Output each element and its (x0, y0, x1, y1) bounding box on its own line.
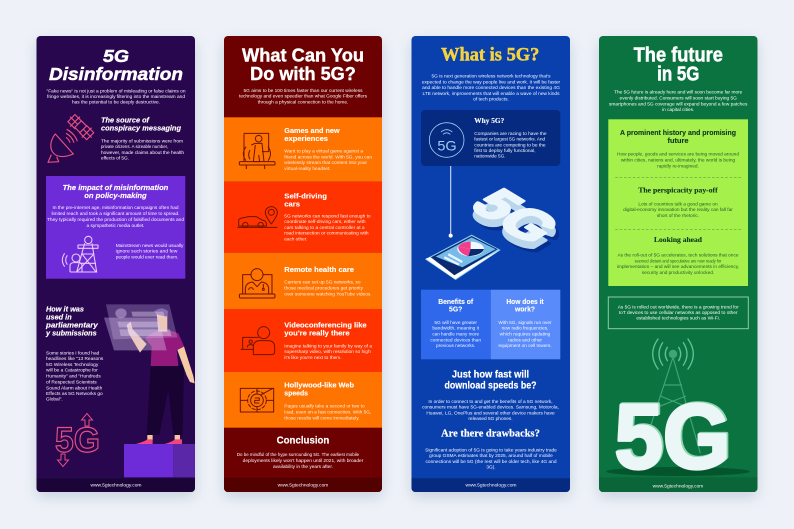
text: drawbacks: Significant adoption of 5G is going to take years industry trade (425, 447, 557, 453)
text: mainstream news: Mainstream news would usually (116, 243, 184, 249)
conclusion: Do be mindful of the hype surrounding 5G. The earliest mobile (237, 452, 359, 458)
text: over someone watching YouTube videos. (284, 291, 372, 297)
text: it's like you're next to them. (284, 355, 342, 361)
text: new radio frequencies, (502, 326, 548, 332)
heading: parliamentary: How it was (46, 304, 84, 313)
text: perspicacity: digital-economy innovation but the reality can fall far (623, 207, 733, 213)
text: prominent history (617, 152, 739, 169)
text: parliamentary: Sound Alarm about Health (46, 385, 103, 391)
text: drawbacks: connections will be 5G (the rest will be older tech, like 4G and (426, 459, 557, 465)
text: previous networks. (436, 343, 475, 349)
heading (284, 321, 367, 338)
text: mainstream news (116, 243, 184, 261)
text: which requires updating (500, 331, 551, 337)
title: Do with 5G? (250, 64, 356, 84)
icon: satellite and dish (48, 112, 97, 162)
intro text: fringe websites, it is increasingly filtering into the mainstream and (47, 94, 185, 100)
text (284, 404, 371, 421)
section: remote health care (239, 265, 372, 298)
text: looking ahead: As the roll-out of 5G accelerates, tech solutions that once (618, 253, 739, 259)
intro text: and able to handle more connected devices than the existing 4G (422, 85, 560, 91)
panel: The future in 5G (599, 36, 758, 492)
heading: prominent history: A prominent history and promising (620, 128, 736, 137)
text: looking ahead (617, 253, 739, 276)
heading: parliamentary (45, 304, 99, 337)
text: source: private citizens. A sizeable number, (101, 144, 168, 150)
text: cars talking to a central controller at a (284, 225, 365, 231)
text: impact: They typically required the production of falsified documents and (47, 217, 184, 223)
title: What Can You (242, 46, 364, 66)
heading: Why 5G? (474, 116, 505, 125)
intro text: expected to change the way people live and work. It will be faster (422, 79, 561, 85)
panel: benefits of 5G (421, 290, 491, 359)
text: first to deploy fully functional, (474, 148, 536, 154)
text: 5G networks can respond fast enough to (284, 213, 371, 219)
text (284, 149, 372, 172)
heading: impact: The impact of misinformation (63, 183, 169, 192)
heading: prominent history (620, 128, 736, 145)
intro text: technology and even speedier than what Google Fiber offers (239, 94, 368, 100)
heading: download speeds (444, 369, 536, 392)
text (474, 131, 547, 160)
title (634, 45, 723, 86)
footer url: www.5gtechnology.com (90, 483, 142, 489)
illustration: big 3D 5G: 5G (616, 385, 732, 487)
text: drawbacks: group GSMA estimates that by 2025, around half of mobile (429, 453, 553, 459)
icon: car and map pin (237, 207, 277, 228)
panel: 5G Disinformation (36, 36, 195, 492)
intro text: has the potential to be deeply destructive. (72, 99, 160, 105)
heading: download speeds: download speeds be? (444, 380, 536, 392)
text: download speeds: released 5G phones. (468, 416, 513, 422)
panel: why 5G (421, 110, 560, 166)
heading (284, 126, 340, 143)
heading: experiences (284, 134, 328, 143)
heading: drawbacks: Are there drawbacks? (441, 429, 540, 440)
text: mainstream news: people would ever read them. (116, 255, 178, 261)
heading: speeds (284, 389, 308, 398)
icon: neon 5G with arrows: 5G (55, 421, 100, 460)
intro text: 5G aims to be 100 times faster than our current wireless (244, 88, 363, 94)
text: Imagine talking to your family by way of a (284, 343, 372, 349)
heading: source: The source of (101, 115, 150, 124)
text: prominent history: How people, goods and services are being moved around (617, 152, 739, 158)
text: prominent history: within cities, nations and, ultimately, the world is being (621, 157, 735, 163)
text: parliamentary: of Respected Scientists (46, 379, 97, 385)
text: looking ahead: security and productivity unlocked. (642, 270, 714, 276)
heading: Videoconferencing like (284, 321, 367, 330)
text: perspicacity: Lots of countries talk a good game on (638, 201, 718, 207)
text: friend across the world. With 5G, you can (284, 154, 372, 160)
connector line (449, 166, 453, 238)
text: parliamentary: Humanity" and "Hundreds (46, 373, 101, 379)
icon: 5G wifi circle: 5G (437, 138, 457, 154)
text: parliamentary: will be a Catastrophe for (46, 368, 98, 374)
heading: source (101, 115, 182, 132)
conclusion: availability in the years after. (273, 464, 333, 470)
text: parliamentary: 5G Wireless Technology (46, 362, 99, 368)
heading: impact (63, 183, 169, 200)
text: each other. (284, 237, 307, 243)
intro text: of tech products. (473, 97, 509, 103)
text: impact: In the pre-internet age, misinformation campaigns often had (52, 205, 179, 211)
text: parliamentary: headlines like "13 Reasons (46, 356, 104, 362)
heading (284, 191, 327, 208)
text: road intersection or communicating with (284, 231, 369, 237)
text: fastest or largest 5G networks. And (474, 137, 545, 143)
heading: Hollywood-like Web (284, 381, 355, 390)
heading: prominent history: future (668, 136, 688, 145)
text: source: The majority of submissions were from (101, 138, 183, 144)
title: Disinformation (49, 64, 183, 84)
heading: you're really there (284, 329, 350, 338)
illustration: isometric 5G: 5G (458, 181, 574, 251)
heading: source: conspiracy messaging (101, 123, 182, 132)
title (242, 46, 364, 84)
section: videoconferencing (241, 321, 372, 361)
section: self-driving cars (237, 191, 371, 243)
footer url: www.5gtechnology.com (466, 483, 516, 489)
text: download speeds: In order to connect to and get the benefits of a 5G network, (428, 399, 553, 405)
heading (506, 297, 544, 314)
intro text: smartphones and 5G coverage will expand beyond a few patches (609, 101, 748, 107)
title: What is 5G? (441, 45, 539, 66)
illustration: big 3D 5G: 5G (614, 386, 730, 488)
text: wirelessly stream that content into your (284, 160, 367, 166)
text: impact (47, 205, 184, 229)
heading: looking ahead: Looking ahead (654, 235, 702, 244)
text: load, even on a fast connection. With 5G, (284, 409, 371, 415)
text: prominent history: rapidly re-imagined. (657, 163, 699, 169)
intro text: The 5G future is already here and will soon become far more (614, 90, 743, 96)
illustration: isometric 5G: 5G (461, 191, 577, 262)
heading (284, 381, 355, 398)
panel: What is 5G (412, 36, 577, 492)
heading: cars (284, 199, 300, 208)
callout: As 5G is rolled out worldwide, there is a growing trend for (618, 304, 739, 310)
title: 5G (103, 46, 129, 66)
illustration: person with holographic screens on platform (104, 304, 195, 477)
panel: green content box (608, 119, 748, 286)
text: drawbacks (425, 447, 557, 471)
footer url: www.5gtechnology.com (653, 484, 703, 490)
heading: 5G? (449, 305, 463, 314)
text (284, 343, 372, 361)
footer url: www.5gtechnology.com (278, 483, 328, 489)
text: supersharp video, with resolution so high (284, 349, 371, 355)
text: looking ahead: implementation – and will see advancements in efficiency, (617, 264, 739, 270)
text: source (101, 138, 184, 162)
callout: IoT devices to use cellular networks as opposed to other (619, 310, 738, 316)
text: Carriers can set up 5G networks, so (284, 280, 361, 286)
text: nationwide 5G. (474, 154, 506, 160)
title (49, 46, 183, 84)
heading: How does it (506, 297, 544, 306)
text (284, 213, 371, 243)
text: countries are competing to be the (474, 142, 546, 148)
text: parliamentary: Global". (46, 397, 63, 403)
text: Companies are racing to have the (474, 131, 547, 137)
text: coordinate self-driving cars, either with (284, 219, 366, 225)
heading: Games and new (284, 126, 340, 135)
intro text (46, 88, 186, 105)
text: Want to play a virtual game against a (284, 149, 363, 155)
intro text: through a physical connection to the home. (258, 99, 348, 105)
heading: impact: on policy-making (84, 191, 147, 200)
text: download speeds (422, 399, 559, 422)
heading: download speeds: Just how fast will (452, 369, 529, 381)
text: bandwidth, meaning it (432, 326, 480, 332)
conclusion: Conclusion (277, 435, 329, 447)
title: The future (634, 45, 723, 67)
text: source: effects of 5G. (101, 156, 129, 162)
heading: Remote health care (284, 265, 354, 274)
text: drawbacks: 3G). (486, 465, 496, 471)
intro text: evenly distributed. Consumers will soon start buying 5G (620, 95, 737, 101)
heading (438, 297, 474, 314)
text: Pages usually take a second or two to (284, 404, 365, 410)
text: those medical procedures get priority (284, 285, 364, 291)
panel: how does it work (491, 290, 560, 359)
text: can handle many more (432, 331, 479, 337)
callout (608, 297, 748, 329)
text: radios and other (508, 337, 542, 343)
callout: established technologies such as Wi-Fi. (636, 316, 720, 322)
text: perspicacity (623, 201, 733, 219)
text: parliamentary (46, 350, 104, 403)
text (498, 320, 552, 349)
conclusion (237, 435, 364, 470)
conclusion: deployments likely won't happen until 2021, with broader (243, 458, 364, 464)
intro text (239, 88, 368, 105)
icon: VR game (239, 133, 275, 169)
text: source: however, made claims about the health (101, 150, 184, 156)
intro text (422, 74, 561, 103)
text: perspicacity: short of the rhetoric. (657, 213, 699, 219)
intro text: "Fake news" is not just a problem of misleading or false claims on (46, 88, 186, 94)
illustration: phone with pie chart (425, 235, 501, 280)
text: impact: limited reach and took a significant amount of time to spread. (52, 211, 180, 217)
section: games (239, 126, 372, 172)
text: those results will come immediately. (284, 415, 360, 421)
intro text: 5G is next generation wireless network technology that's (432, 74, 551, 80)
text: With 5G, signals run over (498, 320, 552, 326)
icon: video call (241, 327, 275, 355)
heading: parliamentary: parliamentary (45, 320, 99, 329)
icon: tower and person (62, 236, 98, 272)
illustration: antenna tower (650, 339, 700, 453)
text: looking ahead: seemed distant and speculative are now ready for (635, 258, 722, 264)
heading: Self-driving (284, 191, 327, 200)
heading: Benefits of (438, 297, 474, 306)
text: impact: a sympathetic media outlet. (86, 223, 144, 229)
heading: perspicacity: The perspicacity pay-off (638, 186, 718, 195)
icon: doctor on laptop (239, 269, 275, 298)
heading: parliamentary: y submissions (45, 328, 97, 337)
text: virtual-reality headset. (284, 166, 331, 172)
intro text: in capital cities. (662, 107, 694, 113)
text: parliamentary: Some stories I found had (46, 350, 100, 356)
text: connected devices than (430, 337, 481, 343)
icon: film countdown (240, 388, 274, 412)
section: hollywood-like web speeds (240, 381, 371, 421)
text (430, 320, 481, 349)
text (284, 280, 372, 297)
text: parliamentary: Effects as 5G Networks go (46, 391, 103, 397)
illustration: isometric 5G: 5G (458, 188, 574, 259)
panel: What Can You Do with 5G (224, 36, 382, 492)
heading: work? (514, 305, 535, 314)
intro text (609, 90, 748, 113)
panel: impact of misinformation (46, 176, 185, 279)
text: download speeds: Huawei, LG, OnePlus and several other device makers have (426, 410, 555, 416)
heading: parliamentary: used in (46, 312, 72, 321)
title: in 5G (657, 64, 699, 86)
text: download speeds: consumers must have 5G-enabled devices. Samsung, Motorola, (422, 405, 559, 411)
text: mainstream news: ignore such stories and few (116, 249, 178, 255)
intro text: LTE network, improvements that will enable a wave of new kinds (422, 91, 560, 97)
text: 5G will have greater (434, 320, 477, 326)
text: equipment on cell towers. (498, 343, 552, 349)
